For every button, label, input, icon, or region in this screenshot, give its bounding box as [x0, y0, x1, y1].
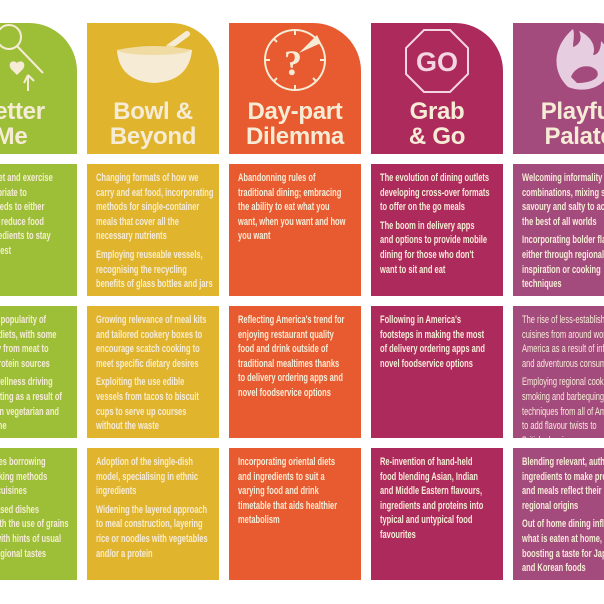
panel: day-part 1	[229, 164, 361, 296]
panel: day-part 1: the ability to eat what you	[238, 201, 330, 213]
panel: bowl 3: rice or noodles with vegetables	[96, 533, 208, 545]
icon: GO stop sign: GO	[416, 47, 458, 77]
panel: grab 1	[371, 164, 503, 296]
panel: bowl 2: vessels from tacos to biscuit	[96, 391, 199, 403]
panel: better me 3	[0, 448, 77, 580]
panel: day-part 1: traditional dining; embracing	[238, 187, 341, 199]
panel: day-part 3	[229, 448, 361, 580]
panel: day-part 2: to delivery ordering apps and	[238, 372, 343, 384]
column: Day-part Dilemma	[229, 23, 361, 580]
icon: clock with question mark	[264, 29, 326, 91]
panel: grab 1: The evolution of dining outlets	[380, 172, 489, 184]
panel: bowl 1: carry and eat food, incorporating	[96, 187, 213, 199]
panel: playful 3: what is eaten at home,	[522, 533, 602, 545]
title	[0, 98, 45, 150]
panel: grab 3: Re-invention of hand-held	[380, 456, 472, 468]
panel: grab 3	[371, 448, 503, 580]
title: Bowl &	[113, 98, 193, 125]
panel: day-part 1: you want	[238, 230, 270, 242]
panel: day-part 2: Reflecting America's trend for	[238, 314, 344, 326]
panel: playful 1: techniques	[522, 278, 562, 290]
panel: grab 2	[371, 306, 503, 438]
panel: bowl 3: Adoption of the single-dish	[96, 456, 193, 468]
panel: bowl 1: methods for single-container	[96, 201, 199, 213]
panel: playful 1: either through regional	[522, 249, 604, 261]
column: Bowl & Beyond	[87, 23, 219, 580]
panel: playful 3	[513, 448, 604, 580]
panel: grab 2: footsteps in making the most	[380, 329, 484, 341]
panel: playful 3: and meals reflect their	[522, 485, 602, 497]
panel: grab 1: want to sit and eat	[380, 264, 445, 276]
panel: playful 2	[513, 306, 604, 438]
panel: day-part 2	[229, 306, 361, 438]
panel: day-part 2: novel foodservice options	[238, 387, 331, 399]
panel: day-part 3: metabolism	[238, 514, 280, 526]
panel: grab 3: food blending Asian, Indian	[380, 471, 478, 483]
panel: bowl 2: Growing relevance of meal kits	[96, 314, 206, 326]
panel: bowl 2: without the waste	[96, 420, 159, 432]
panel: bowl 2: meet specific dietary desires	[96, 358, 198, 370]
panel: bowl 1: meals that cover all the	[96, 216, 179, 228]
panel: day-part 3: Incorporating oriental diets	[238, 456, 335, 468]
panel: day-part 2: food and drink outside of	[238, 343, 328, 355]
header: Bowl & Beyond	[87, 23, 219, 154]
panel: grab 2: of delivery ordering apps and	[380, 343, 485, 355]
title: Dilemma	[246, 123, 344, 150]
panel: bowl 3	[87, 448, 219, 580]
panel: bowl 2: Exploiting the use edible	[96, 376, 184, 388]
panel: bowl 3: Widening the layered approach	[96, 504, 207, 516]
title	[110, 98, 196, 150]
panel: bowl 1: necessary nutrients	[96, 230, 167, 242]
panel: grab 2: novel foodservice options	[380, 358, 473, 370]
panel: day-part 1: want, when you want and how	[238, 216, 345, 228]
panel: grab 3: favourites	[380, 529, 416, 541]
panel: playful 3: and Korean foods	[522, 562, 586, 574]
title: Grab	[410, 98, 464, 125]
title	[541, 98, 604, 150]
panel: playful 3: regional origins	[522, 500, 578, 512]
panel: bowl 2: cups to serve up courses	[96, 406, 186, 418]
panel: playful 2: to add flavour twists to	[522, 420, 597, 432]
panel: bowl 1: Changing formats of how we	[96, 172, 198, 184]
icon: GO stop sign	[405, 29, 469, 93]
title: Day-part	[248, 98, 342, 125]
panel: grab 1: developing cross-over formats	[380, 187, 490, 199]
panel: bowl 1: Employing reuseable vessels,	[96, 249, 203, 261]
icon: bowl with spoon	[117, 31, 192, 83]
panel: day-part 3: timetable that aids healthier	[238, 500, 337, 512]
panel: grab 1: to offer on the go meals	[380, 201, 465, 213]
title: Beyond	[110, 123, 196, 150]
panel: bowl 1: recognising the recycling	[96, 264, 187, 276]
panel: playful 1: inspiration or cooking	[522, 264, 601, 276]
panel: bowl 3: model, specialising in ethnic	[96, 471, 198, 483]
panel: grab 1: The boom in delivery apps	[380, 220, 475, 232]
header: Better Me	[0, 23, 77, 154]
panel: day-part 2: enjoying restaurant quality	[238, 329, 334, 341]
header: Playful Palate	[513, 23, 604, 154]
panel: day-part 2: traditional mealtimes thanks	[238, 358, 339, 370]
header: Day-part Dilemma	[229, 23, 361, 154]
panel: grab 3: ingredients and proteins into	[380, 500, 483, 512]
panel: bowl 2: encourage scatch cooking to	[96, 343, 200, 355]
panel: grab 1: and options to provide mobile	[380, 234, 487, 246]
column: Playful Palate	[513, 23, 604, 580]
icon: flame with chilli	[556, 29, 604, 90]
panel: bowl 3: and/or a protein	[96, 548, 153, 560]
panel: better me 1	[0, 164, 77, 296]
panel: bowl 2	[87, 306, 219, 438]
panel: playful 2: smoking and barbequing	[522, 391, 604, 403]
panel: day-part 3: varying food and drink	[238, 485, 319, 497]
icon: clock with question mark: ?	[284, 43, 302, 83]
title	[246, 98, 344, 150]
panel: playful 1: the best of all worlds	[522, 216, 597, 228]
panel: grab 3: and Middle Eastern flavours,	[380, 485, 482, 497]
panel: day-part 1: Abandonning rules of	[238, 172, 315, 184]
panel: grab 2: Following in America's	[380, 314, 461, 326]
header: Grab & Go	[371, 23, 503, 154]
panel: grab 1: dining for those who don't	[380, 249, 474, 261]
column: Better Me	[0, 23, 77, 580]
panel: bowl 3: ingredients	[96, 485, 136, 497]
column: Grab & Go	[371, 23, 503, 580]
icon: person with heart	[0, 24, 44, 91]
panel: grab 3: typical and untypical food	[380, 514, 472, 526]
panel: bowl 2: and tailored cookery boxes to	[96, 329, 202, 341]
title: & Go	[409, 123, 465, 150]
panel: playful 1	[513, 164, 604, 296]
panel: better me 2	[0, 306, 77, 438]
title	[409, 98, 465, 150]
panel: bowl 3: to meal construction, layering	[96, 518, 203, 530]
panel: bowl 1	[87, 164, 219, 296]
panel: day-part 3: and ingredients to suit a	[238, 471, 325, 483]
panel: bowl 1: benefits of glass bottles and jars	[96, 278, 213, 290]
